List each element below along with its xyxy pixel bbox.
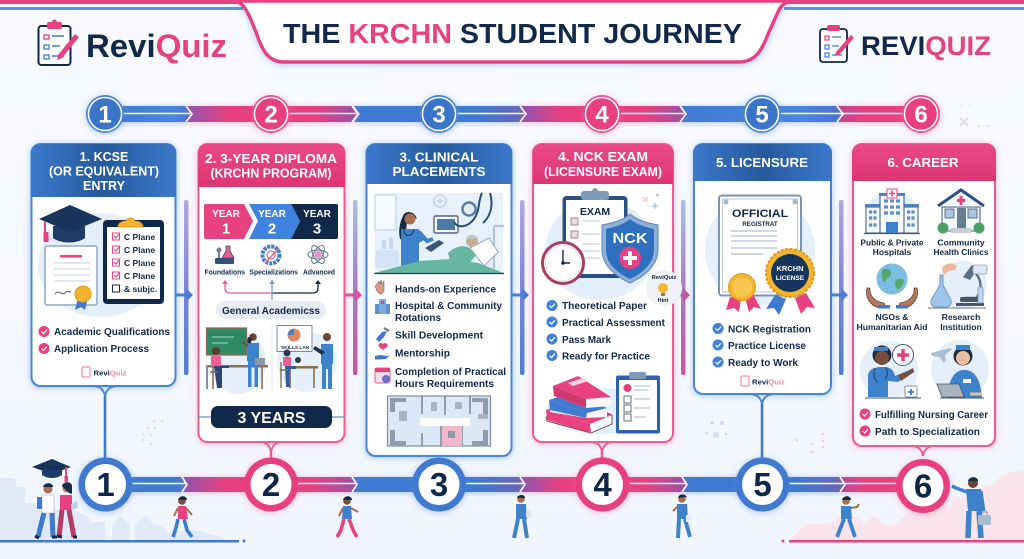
icon: specialization gear [262,246,280,264]
illustration: official certificate [705,195,815,315]
bullet list [38,326,170,355]
panel: 1 KCSE entry [31,144,176,460]
icon: exam clipboard: EXAM [580,206,610,218]
icon: clipboard and pencil [38,20,79,65]
NGO label: NGOs & [876,312,908,322]
small logo: ReviQuiz [94,368,127,378]
checklist items: C Plane [124,232,155,242]
icon: checklist clipboard [103,218,164,304]
icon: clock [542,242,584,284]
top step 2 [252,95,290,133]
year chevrons: 1 [222,220,230,238]
hospital label: Hospitals [873,247,912,257]
checklist of clinical topics [375,280,506,390]
icon: skill [376,328,389,342]
checklist of clinical topics: Hospital & Community [395,300,502,312]
bottom step 4 [576,458,630,512]
3 years banner [198,406,345,428]
bottom step 6 [896,459,950,513]
arrows to focus areas [222,280,321,300]
checklist of clinical topics: Skill Development [395,330,483,342]
heading: 3. CLINICAL [400,150,479,164]
bullet list: Ready for Practice [562,350,650,362]
top step 6: 6 [914,102,928,128]
arrow: between cards 4 and 5 [673,200,690,375]
illustration: classroom [206,324,337,394]
research label: Institution [940,322,982,332]
bullet list: Practice License [728,340,806,352]
icon: mentorship [375,343,390,360]
bullet list: Path to Specialization [875,426,980,438]
3 years banner: 3 YEARS [238,410,306,427]
hospital label [860,238,924,257]
icon: community clinic [938,190,984,234]
icon: globe in hands [866,264,918,308]
illustration: classroom: SKILLS LAN [281,345,310,351]
icon: hand [375,280,384,294]
figure: walking student 2 [337,496,358,537]
bottom step 1 [78,458,132,512]
checklist items: & subjc. [124,284,157,294]
heading [198,144,345,187]
illustration: floor plan [388,396,490,446]
ground lines [0,540,1024,542]
year chevrons: 3 [313,220,321,238]
bullet list [546,300,665,362]
top step 4: 4 [595,102,609,128]
icon: certificate: OFFICIAL [732,208,788,220]
heading [533,144,673,184]
panel: 3 clinical placements [366,144,512,456]
heading: ENTRY [83,179,126,193]
top step 3 [420,95,458,133]
heading: (OR EQUIVALENT) [49,164,159,178]
icon: KRCHN license seal [766,249,815,315]
research label: Research [942,312,980,322]
icon: checklist [616,372,660,434]
heading: 2. 3-YEAR DIPLOMA [205,152,337,166]
icon: KRCHN license seal: KRCHN [776,264,804,273]
illustration: books and checklist [546,372,660,434]
top step 6 [902,95,940,133]
icon: hospital [864,189,920,234]
year focus labels: Advanced [303,268,335,276]
arrow: between cards 3 and 4 [512,200,529,375]
icon: research microscope and flask [928,261,987,309]
checklist items [112,232,157,294]
top step 5: 5 [755,102,769,128]
year chevrons [204,204,338,239]
top step 5 [743,95,781,133]
year focus labels [204,268,335,276]
bullet list [712,323,811,369]
hospital label: Public & Private [860,238,924,248]
icon: NCK shield: NCK [612,230,648,247]
checklist of clinical topics: Mentorship [395,348,450,360]
illustration: nurse with laptop and plane [931,340,989,398]
icon: graduation cap [39,205,102,242]
logo: right ReviQuiz [820,25,991,62]
icon: hospital [375,299,390,314]
icon: diploma [45,246,97,310]
logo: left ReviQuiz: ReviQuiz [86,28,227,64]
figure: walking student 1 [173,496,192,537]
figure: two students with graduation cap [32,459,78,538]
small logo [741,376,785,386]
bottom step 3: 3 [430,466,448,503]
bottom step 2 [244,458,298,512]
heading: (LICENSURE EXAM) [544,165,662,179]
arrow: between cards 2 and 3 [345,200,362,375]
icon: clipboard and pencil [820,25,854,62]
panel: 2 3-year diploma [198,144,345,460]
heading: 4. NCK EXAM [558,150,648,164]
heading [366,144,512,184]
figure: walking nurse 5 [837,496,859,537]
small logo [82,367,127,378]
top step 3: 3 [432,102,446,128]
heading [852,144,996,181]
NGO label [856,312,928,332]
bottom step 5: 5 [753,466,772,503]
bullet list: NCK Registration [728,324,811,336]
icon: calendar [375,368,390,383]
bullet list: Pass Mark [562,334,611,346]
small logo: ReviQuiz [752,378,785,386]
illustration: nurse at bedside [374,193,504,274]
icon: hint badge: Hint [658,298,669,304]
top step 1 [86,95,124,133]
heading [693,144,832,181]
checklist items: C Plane [124,245,155,255]
heading: 6. CAREER [888,155,959,170]
NGO label: Humanitarian Aid [856,322,928,332]
year focus labels: Foundations [204,268,245,276]
bottom step 3 [412,458,466,512]
bullet list: Practical Assessment [562,317,665,329]
figure: professional nurse with bag [952,477,991,538]
header ribbon with title [0,0,1024,62]
checklist of clinical topics: Completion of Practical [395,366,506,378]
heading: (KRCHN PROGRAM) [210,166,332,180]
icon: advanced atom [308,244,328,265]
illustration: nurse with aid speech bubble [860,341,921,399]
heading [31,144,176,197]
year chevrons: YEAR [303,209,332,220]
bullet list: Application Process [54,343,149,355]
figure: walking nurse 3 [514,495,531,538]
bottom step 5 [736,458,790,512]
bottom step 6: 6 [914,468,932,504]
panel: 6 career [852,144,996,456]
bullet list: Fulfilling Nursing Career [875,409,988,421]
heading: 1. KCSE [80,150,128,164]
icon: foundations flask [215,246,234,264]
year chevrons: 2 [268,220,276,238]
checklist of clinical topics: Rotations [395,312,441,324]
arrow: between cards 5 and 6 [831,200,848,375]
bottom step 2: 2 [262,466,280,503]
bullet list: Ready to Work [728,357,798,369]
top step 2: 2 [264,102,278,128]
year focus labels: Specializations [250,268,298,276]
icon: hint badge: ReviQuiz [652,275,676,281]
year chevrons: YEAR [258,209,287,220]
illustration: exam, shield and clock [542,188,682,306]
checklist of clinical topics: Hands-on Experience [395,284,496,296]
figure: walking nurse 4 [673,494,691,538]
top step 1: 1 [98,102,112,128]
clinic label [934,238,989,257]
checklist of clinical topics: Hours Requirements [395,378,494,390]
icon: KRCHN license seal: LICENSE [776,275,805,282]
panel: 5 licensure [693,144,832,460]
checklist items: C Plane [124,271,155,281]
clinic label: Community [937,238,985,248]
logo: right ReviQuiz: REVIQUIZ [861,31,991,61]
General Academics pill [216,301,326,319]
top step 4 [583,95,621,133]
bottom step 1: 1 [96,466,115,503]
icon: gold medal [726,274,761,312]
bottom timeline [78,458,950,513]
icon: hint badge [646,270,682,306]
bullet list: Theoretical Paper [562,300,647,312]
top timeline [86,95,940,133]
year chevrons: YEAR [212,209,241,220]
logo: left ReviQuiz [38,20,227,65]
arrow: between cards 1 and 2 [176,200,193,375]
heading: PLACEMENTS [392,165,486,179]
panel: 4 NCK exam [533,144,682,460]
clinic label: Health Clinics [934,247,989,257]
General Academics pill: General Academicss [222,305,320,317]
icon: book stack [546,376,612,433]
bullet list [860,408,988,438]
icon: certificate [719,196,801,296]
title: THE KRCHN STUDENT JOURNEY [283,18,742,49]
research label [940,312,982,332]
illustration: cap, diploma and checklist [38,205,164,317]
bottom step 4: 4 [593,466,612,503]
heading: 5. LICENSURE [716,155,808,170]
skyline: right pink city [790,471,1024,540]
bullet list: Academic Qualifications [54,326,170,338]
checklist items: C Plane [124,258,155,268]
skyline: left blue city [0,478,225,540]
icon: certificate: REGISTRAT [742,221,778,228]
